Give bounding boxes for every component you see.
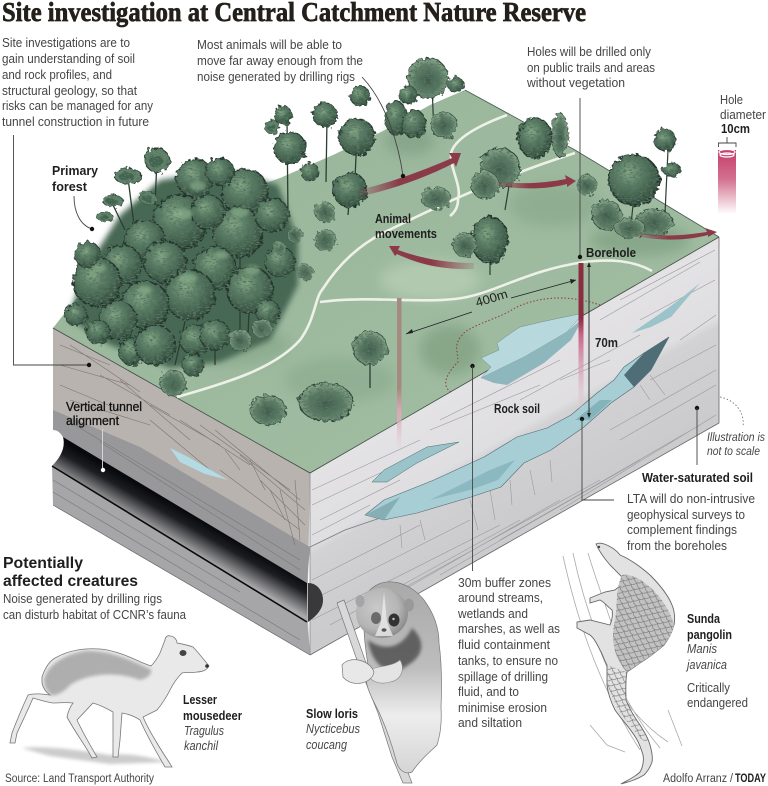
illustration: lesser mousedeer: Lesser bbox=[183, 693, 217, 707]
leader and label: water-saturated soil: Water-saturated soil bbox=[642, 471, 753, 485]
label: animal movements: Animal bbox=[375, 212, 411, 226]
buffer zones note: minimise erosion bbox=[458, 701, 547, 715]
leader and label: borehole bbox=[578, 98, 636, 260]
leader: animals bbox=[362, 77, 405, 178]
dimension 70m: 70m bbox=[595, 336, 618, 350]
buffer zones note: wetlands and bbox=[457, 607, 528, 621]
right soil face bbox=[310, 237, 719, 655]
surface pond bbox=[481, 313, 584, 378]
survey note: complement findings bbox=[627, 523, 737, 537]
label: vertical tunnel alignment: alignment bbox=[66, 414, 120, 428]
illustration: lesser mousedeer: Tragulus bbox=[184, 724, 224, 738]
boreholes bbox=[397, 263, 584, 448]
animals note: move far away enough from the bbox=[197, 54, 363, 68]
trees upper right bbox=[350, 58, 681, 275]
survey note: LTA will do non-intrusive bbox=[627, 492, 755, 506]
label: rock soil: Rock soil bbox=[494, 402, 540, 416]
source: Source: Land Transport Authority bbox=[5, 773, 154, 785]
label: animal movements: movements bbox=[375, 227, 437, 241]
illustration: slow loris: coucang bbox=[306, 738, 347, 752]
animals note: Most animals will be able to bbox=[197, 38, 342, 52]
leader: left soil face bbox=[14, 135, 91, 367]
hole diameter: Hole bbox=[720, 93, 743, 107]
survey note bbox=[580, 417, 755, 553]
illustration: slow loris: Slow loris bbox=[306, 707, 358, 721]
section heading: creatures: Potentially bbox=[3, 555, 83, 572]
buffer zones note: marshes, as well as bbox=[458, 622, 560, 636]
buffer zones note bbox=[457, 364, 560, 730]
buffer zones note: 30m buffer zones bbox=[458, 576, 551, 590]
illustration: sunda pangolin: endangered bbox=[687, 696, 748, 710]
illustration: sunda pangolin: Sunda bbox=[687, 612, 721, 626]
buffer zones note: tanks, to ensure no bbox=[458, 654, 558, 668]
illustration: sunda pangolin: Manis bbox=[687, 642, 717, 656]
label: vertical tunnel alignment: Vertical tunnel bbox=[66, 400, 142, 414]
dimension 400m bbox=[406, 279, 576, 334]
illustration: lesser mousedeer: kanchil bbox=[184, 739, 219, 753]
buffer zones note: and siltation bbox=[458, 716, 522, 730]
tunnel end cap bbox=[308, 583, 323, 622]
intro text: tunnel construction in future bbox=[2, 115, 149, 129]
label: vertical tunnel alignment bbox=[66, 400, 142, 472]
shading patches bbox=[170, 125, 690, 402]
label: primary forest: forest bbox=[52, 179, 88, 194]
credit: Adolfo Arranz / bbox=[663, 773, 734, 785]
holes note bbox=[526, 45, 655, 90]
illustration: lesser mousedeer: mousedeer bbox=[183, 709, 242, 723]
illustration: sunda pangolin: javanica bbox=[685, 658, 727, 672]
green surface bbox=[53, 90, 719, 473]
intro text: Site investigations are to bbox=[2, 36, 130, 50]
section heading: creatures bbox=[3, 555, 186, 622]
water lens main bbox=[365, 337, 669, 520]
intro text: structural geology, so that bbox=[2, 84, 137, 98]
scale note: not to scale bbox=[707, 446, 760, 458]
label: animal movements bbox=[375, 212, 437, 241]
illustration: sunda pangolin: Critically bbox=[687, 681, 731, 695]
hole diameter: 10cm bbox=[721, 121, 750, 136]
survey note: geophysical surveys to bbox=[627, 508, 745, 522]
scale note bbox=[707, 397, 765, 458]
dimension 70m bbox=[587, 262, 618, 418]
buffer zones note: fluid containment bbox=[458, 638, 550, 652]
animals note bbox=[197, 38, 363, 84]
water lens upper right bbox=[632, 283, 700, 333]
gray stratum bbox=[53, 410, 310, 583]
buffer zones note: fluid, and to bbox=[458, 685, 519, 699]
animal movement arrows bbox=[358, 153, 717, 269]
water lens upper left bbox=[372, 442, 459, 482]
lower trees on meadow bbox=[250, 331, 387, 425]
label: primary forest: Primary bbox=[52, 163, 99, 178]
left soil face bbox=[53, 328, 310, 655]
hole diameter: diameter bbox=[720, 108, 766, 122]
holes note: Holes will be drilled only bbox=[527, 45, 652, 59]
label: primary forest bbox=[52, 163, 99, 231]
leader and label: borehole: Borehole bbox=[586, 245, 636, 260]
intro text: risks can be managed for any bbox=[2, 99, 154, 113]
section heading: creatures: can disturb habitat of CCNR’s fauna bbox=[3, 608, 186, 622]
buffer zone boundary bbox=[446, 298, 600, 392]
water lens left face bbox=[170, 448, 228, 480]
holes note: on public trails and areas bbox=[527, 61, 655, 75]
illustration: slow loris bbox=[306, 582, 442, 783]
hole diameter bbox=[718, 93, 766, 214]
illustration: slow loris: Nycticebus bbox=[306, 722, 360, 736]
trails bbox=[177, 115, 652, 397]
illustration: sunda pangolin bbox=[563, 543, 748, 784]
holes note: without vegetation bbox=[526, 76, 625, 90]
section heading: creatures: affected creatures bbox=[3, 573, 138, 590]
survey note: from the boreholes bbox=[627, 539, 727, 553]
intro text bbox=[2, 36, 154, 129]
section heading: creatures: Noise generated by drilling rigs bbox=[3, 592, 162, 606]
terrain block bbox=[52, 90, 719, 655]
illustration: lesser mousedeer bbox=[10, 636, 242, 767]
animals note: noise generated by drilling rigs bbox=[197, 70, 355, 84]
tunnel band bbox=[52, 437, 307, 622]
leader and label: water-saturated soil bbox=[642, 406, 753, 485]
buffer zones note: spillage of drilling bbox=[458, 670, 548, 684]
intro text: gain understanding of soil bbox=[2, 52, 135, 66]
illustration: sunda pangolin: pangolin bbox=[687, 628, 732, 642]
buffer zones note: around streams, bbox=[458, 591, 543, 605]
dimension 400m: 400m bbox=[474, 287, 509, 310]
forest bbox=[65, 103, 375, 396]
intro text: and rock profiles, and bbox=[2, 68, 112, 82]
lower rock layer bbox=[52, 466, 310, 655]
